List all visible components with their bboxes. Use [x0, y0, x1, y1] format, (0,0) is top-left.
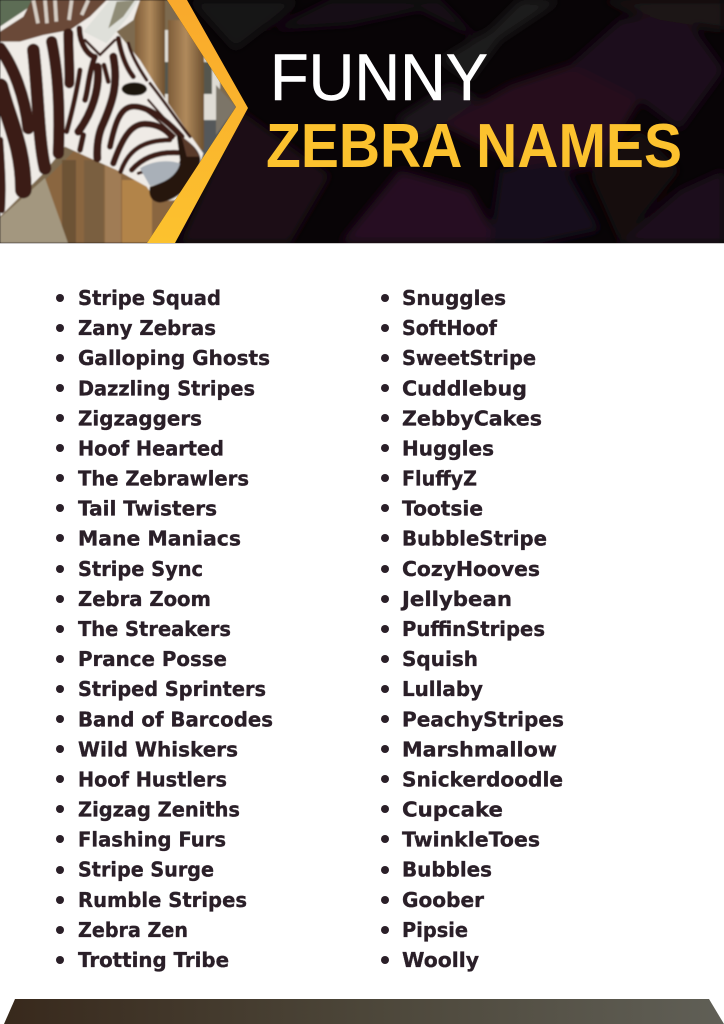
header banner: [0, 0, 724, 244]
dark geometric background: [180, 0, 724, 243]
title line: zebra names: ZEBRA NAMES: [266, 112, 682, 181]
name: Zigzaggers: [78, 406, 202, 430]
background sky and fence: [160, 30, 220, 120]
zebra photo: [0, 0, 240, 243]
name: Mane Maniacs: [78, 527, 241, 551]
name: Rumble Stripes: [78, 888, 247, 912]
name: Stripe Sync: [78, 557, 203, 581]
name: Tail Twisters: [78, 497, 217, 521]
name: Striped Sprinters: [78, 677, 266, 701]
muzzle: [149, 135, 200, 203]
name: PeachyStripes: [402, 707, 564, 731]
name: CozyHooves: [402, 557, 540, 581]
name: Hoof Hustlers: [78, 767, 227, 791]
name: SweetStripe: [402, 346, 536, 370]
name: Wild Whiskers: [78, 737, 238, 761]
name: Trotting Tribe: [78, 948, 229, 972]
name: Marshmallow: [402, 737, 557, 761]
name: Huggles: [402, 436, 494, 460]
name: Stripe Squad: [78, 286, 221, 310]
name: Cupcake: [402, 798, 503, 822]
name: TwinkleToes: [402, 828, 540, 852]
name: SoftHoof: [402, 316, 498, 340]
name: Woolly: [402, 948, 479, 972]
name: Bubbles: [402, 858, 492, 882]
name: BubbleStripe: [402, 527, 547, 551]
eye: [122, 82, 147, 96]
ear: [83, 0, 138, 43]
name: The Zebrawlers: [78, 466, 249, 490]
name: The Streakers: [78, 617, 231, 641]
name: ZebbyCakes: [402, 406, 542, 430]
name: Zebra Zen: [78, 918, 188, 942]
name: Cuddlebug: [402, 376, 527, 400]
name: Lullaby: [402, 677, 483, 701]
name: Prance Posse: [78, 647, 227, 671]
name: Band of Barcodes: [78, 707, 273, 731]
name: Galloping Ghosts: [78, 346, 270, 370]
names list: right column: [381, 286, 564, 972]
name: Pipsie: [402, 918, 468, 942]
wooden posts: [135, 0, 166, 99]
stripes: [0, 28, 190, 210]
name: Snickerdoodle: [402, 767, 563, 791]
name: Hoof Hearted: [78, 436, 224, 460]
name: PuffinStripes: [402, 617, 545, 641]
name: Zebra Zoom: [78, 587, 211, 611]
name: Snuggles: [402, 286, 506, 310]
title line: funny: FUNNY: [270, 40, 488, 114]
sandy ground: [0, 178, 68, 243]
name: Goober: [402, 888, 485, 912]
mane: [0, 0, 107, 42]
name: Tootsie: [402, 497, 483, 521]
yellow chevron: [147, 0, 248, 243]
name: Squish: [402, 647, 478, 671]
name: Flashing Furs: [78, 828, 226, 852]
name: Stripe Surge: [78, 858, 214, 882]
title: [266, 40, 682, 181]
name: Zany Zebras: [78, 316, 216, 340]
name: Jellybean: [400, 587, 512, 611]
name: FluffyZ: [402, 466, 477, 490]
zebra head: [0, 0, 203, 217]
name: Zigzag Zeniths: [78, 798, 240, 822]
footer bar: [4, 999, 724, 1024]
names list: left column: [56, 286, 273, 972]
name: Dazzling Stripes: [78, 376, 255, 400]
